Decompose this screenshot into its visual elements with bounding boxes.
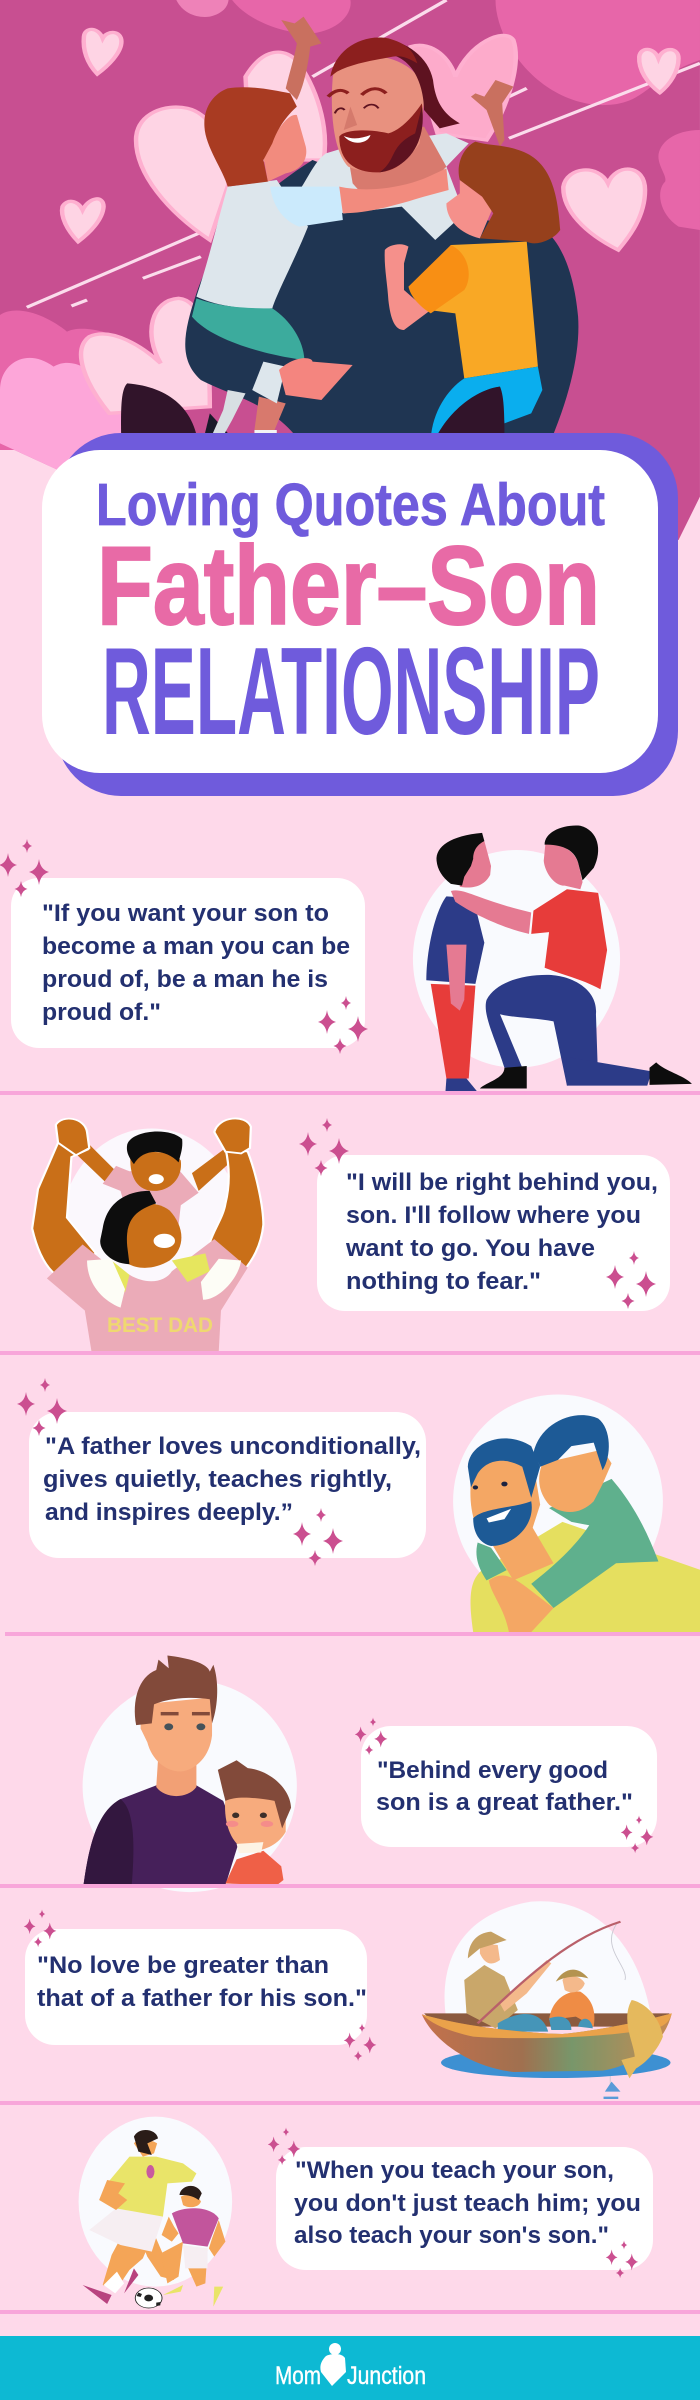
fish <box>621 2000 663 2078</box>
quote 2 <box>317 1155 670 1311</box>
speech card <box>317 1155 670 1311</box>
illustration 4: father with young son <box>83 1655 297 1892</box>
quote text: nothing to fear." <box>346 1268 541 1295</box>
right boy <box>385 80 560 450</box>
left boy <box>192 17 449 440</box>
boat <box>422 2013 672 2072</box>
teal band <box>0 2336 700 2400</box>
father head <box>468 1438 540 1546</box>
illustration 2: son on father's shoulders <box>32 1118 263 1352</box>
light cloud bottom left <box>0 358 125 483</box>
illustration 1: father kneeling before son <box>413 826 692 1091</box>
father <box>451 826 692 1088</box>
father sweater <box>83 1785 239 1885</box>
father collar and neck <box>295 133 469 240</box>
speech card <box>29 1412 426 1558</box>
white diagonal lines <box>27 0 700 307</box>
background clouds <box>0 0 700 450</box>
quote 5 <box>25 1929 367 2045</box>
white backdrop <box>453 1394 663 1608</box>
quote text: you don't just teach him; you <box>294 2190 641 2217</box>
white backdrop <box>83 1680 297 1892</box>
speech card <box>25 1929 367 2045</box>
father hand <box>252 362 286 403</box>
white backdrop <box>413 850 620 1068</box>
quote text: proud of, be a man he is <box>42 966 328 993</box>
white backdrop <box>60 1128 243 1336</box>
hero illustration: father hugging two sons <box>0 0 700 540</box>
quote text <box>42 900 350 1026</box>
quote text: that of a father for his son." <box>37 1985 367 2012</box>
illustration 6: father and son playing football <box>79 2117 232 2308</box>
quote text: "A father loves unconditionally, <box>45 1433 421 1460</box>
football <box>135 2288 162 2308</box>
quote text: gives quietly, teaches rightly, <box>43 1466 392 1493</box>
float <box>604 2082 620 2099</box>
white card <box>42 450 658 773</box>
quote text: son is a great father." <box>376 1789 633 1816</box>
quote text <box>294 2157 641 2249</box>
father smile <box>154 1234 175 1248</box>
father shirt <box>47 1239 248 1352</box>
illustration 5: father and son fishing in a boat <box>422 1901 672 2099</box>
illustration 3: son hugging father from behind <box>453 1394 700 1632</box>
father head <box>328 37 460 172</box>
footer band with logo <box>0 2336 700 2400</box>
title line 1: Loving Quotes About <box>96 472 605 538</box>
fishing line <box>610 1922 625 2087</box>
quote text: "If you want your son to <box>42 900 329 927</box>
child's legs and shoes <box>112 1253 210 1293</box>
quote text: and inspires deeply.” <box>45 1499 293 1526</box>
purple backing <box>56 433 678 796</box>
quote text: "I will be right behind you, <box>346 1169 658 1196</box>
quote text <box>37 1952 367 2012</box>
water <box>441 2047 670 2078</box>
son head <box>533 1415 612 1512</box>
logo wordmark: Junction <box>347 2362 426 2390</box>
father neck <box>156 1753 196 1796</box>
quote text <box>376 1757 633 1816</box>
father <box>83 2130 196 2304</box>
clasped hands <box>489 1576 554 1632</box>
speech card <box>11 878 365 1048</box>
boat interior <box>424 2013 670 2027</box>
father hair <box>100 1191 156 1264</box>
logo wordmark <box>275 2362 426 2390</box>
speech card <box>276 2147 653 2270</box>
quote text <box>43 1433 421 1526</box>
sparkle clusters <box>0 839 656 2278</box>
title card <box>42 433 678 796</box>
father body <box>471 1522 700 1632</box>
best dad shirt text: BEST DAD <box>107 1314 213 1337</box>
hero pink background <box>0 0 700 540</box>
son shirt <box>225 1851 283 1885</box>
quote text: son. I'll follow where you <box>346 1202 641 1229</box>
father head <box>135 1655 217 1772</box>
quote 3 <box>29 1412 426 1558</box>
father <box>464 1932 551 2032</box>
light pink corner <box>0 390 125 483</box>
quote 4 <box>361 1726 657 1847</box>
son head <box>218 1760 291 1853</box>
boat rim <box>422 2013 672 2038</box>
knees <box>121 383 199 450</box>
quote text <box>345 1169 658 1295</box>
pale hearts <box>62 29 679 413</box>
father neck <box>491 1525 554 1580</box>
son torso and arm <box>531 1479 658 1608</box>
son's far arm <box>476 1543 507 1580</box>
father body <box>185 160 578 450</box>
quote text: want to go. You have <box>345 1235 595 1262</box>
quote text: "Behind every good <box>377 1757 608 1784</box>
title line 2: Father–Son <box>97 524 600 648</box>
quote text: "No love be greater than <box>37 1952 329 1979</box>
quote 1 <box>11 878 365 1048</box>
fishing rod <box>478 1922 620 2023</box>
logo wordmark: Mom <box>275 2362 321 2390</box>
quote 6 <box>276 2147 653 2270</box>
child <box>74 1132 232 1225</box>
quote text: also teach your son's son." <box>294 2222 609 2249</box>
quote text: become a man you can be <box>42 933 350 960</box>
speech card <box>361 1726 657 1847</box>
quote text: "When you teach your son, <box>295 2157 614 2184</box>
white backdrop <box>79 2117 232 2287</box>
son <box>161 2186 225 2307</box>
father sleeve <box>83 1799 133 1885</box>
father arms <box>32 1118 263 1275</box>
logo icon <box>320 2343 346 2386</box>
quote text: proud of." <box>42 999 161 1026</box>
son <box>549 1970 594 2030</box>
father head <box>107 1203 181 1268</box>
son <box>426 833 491 1091</box>
white backdrop <box>445 1901 652 2020</box>
